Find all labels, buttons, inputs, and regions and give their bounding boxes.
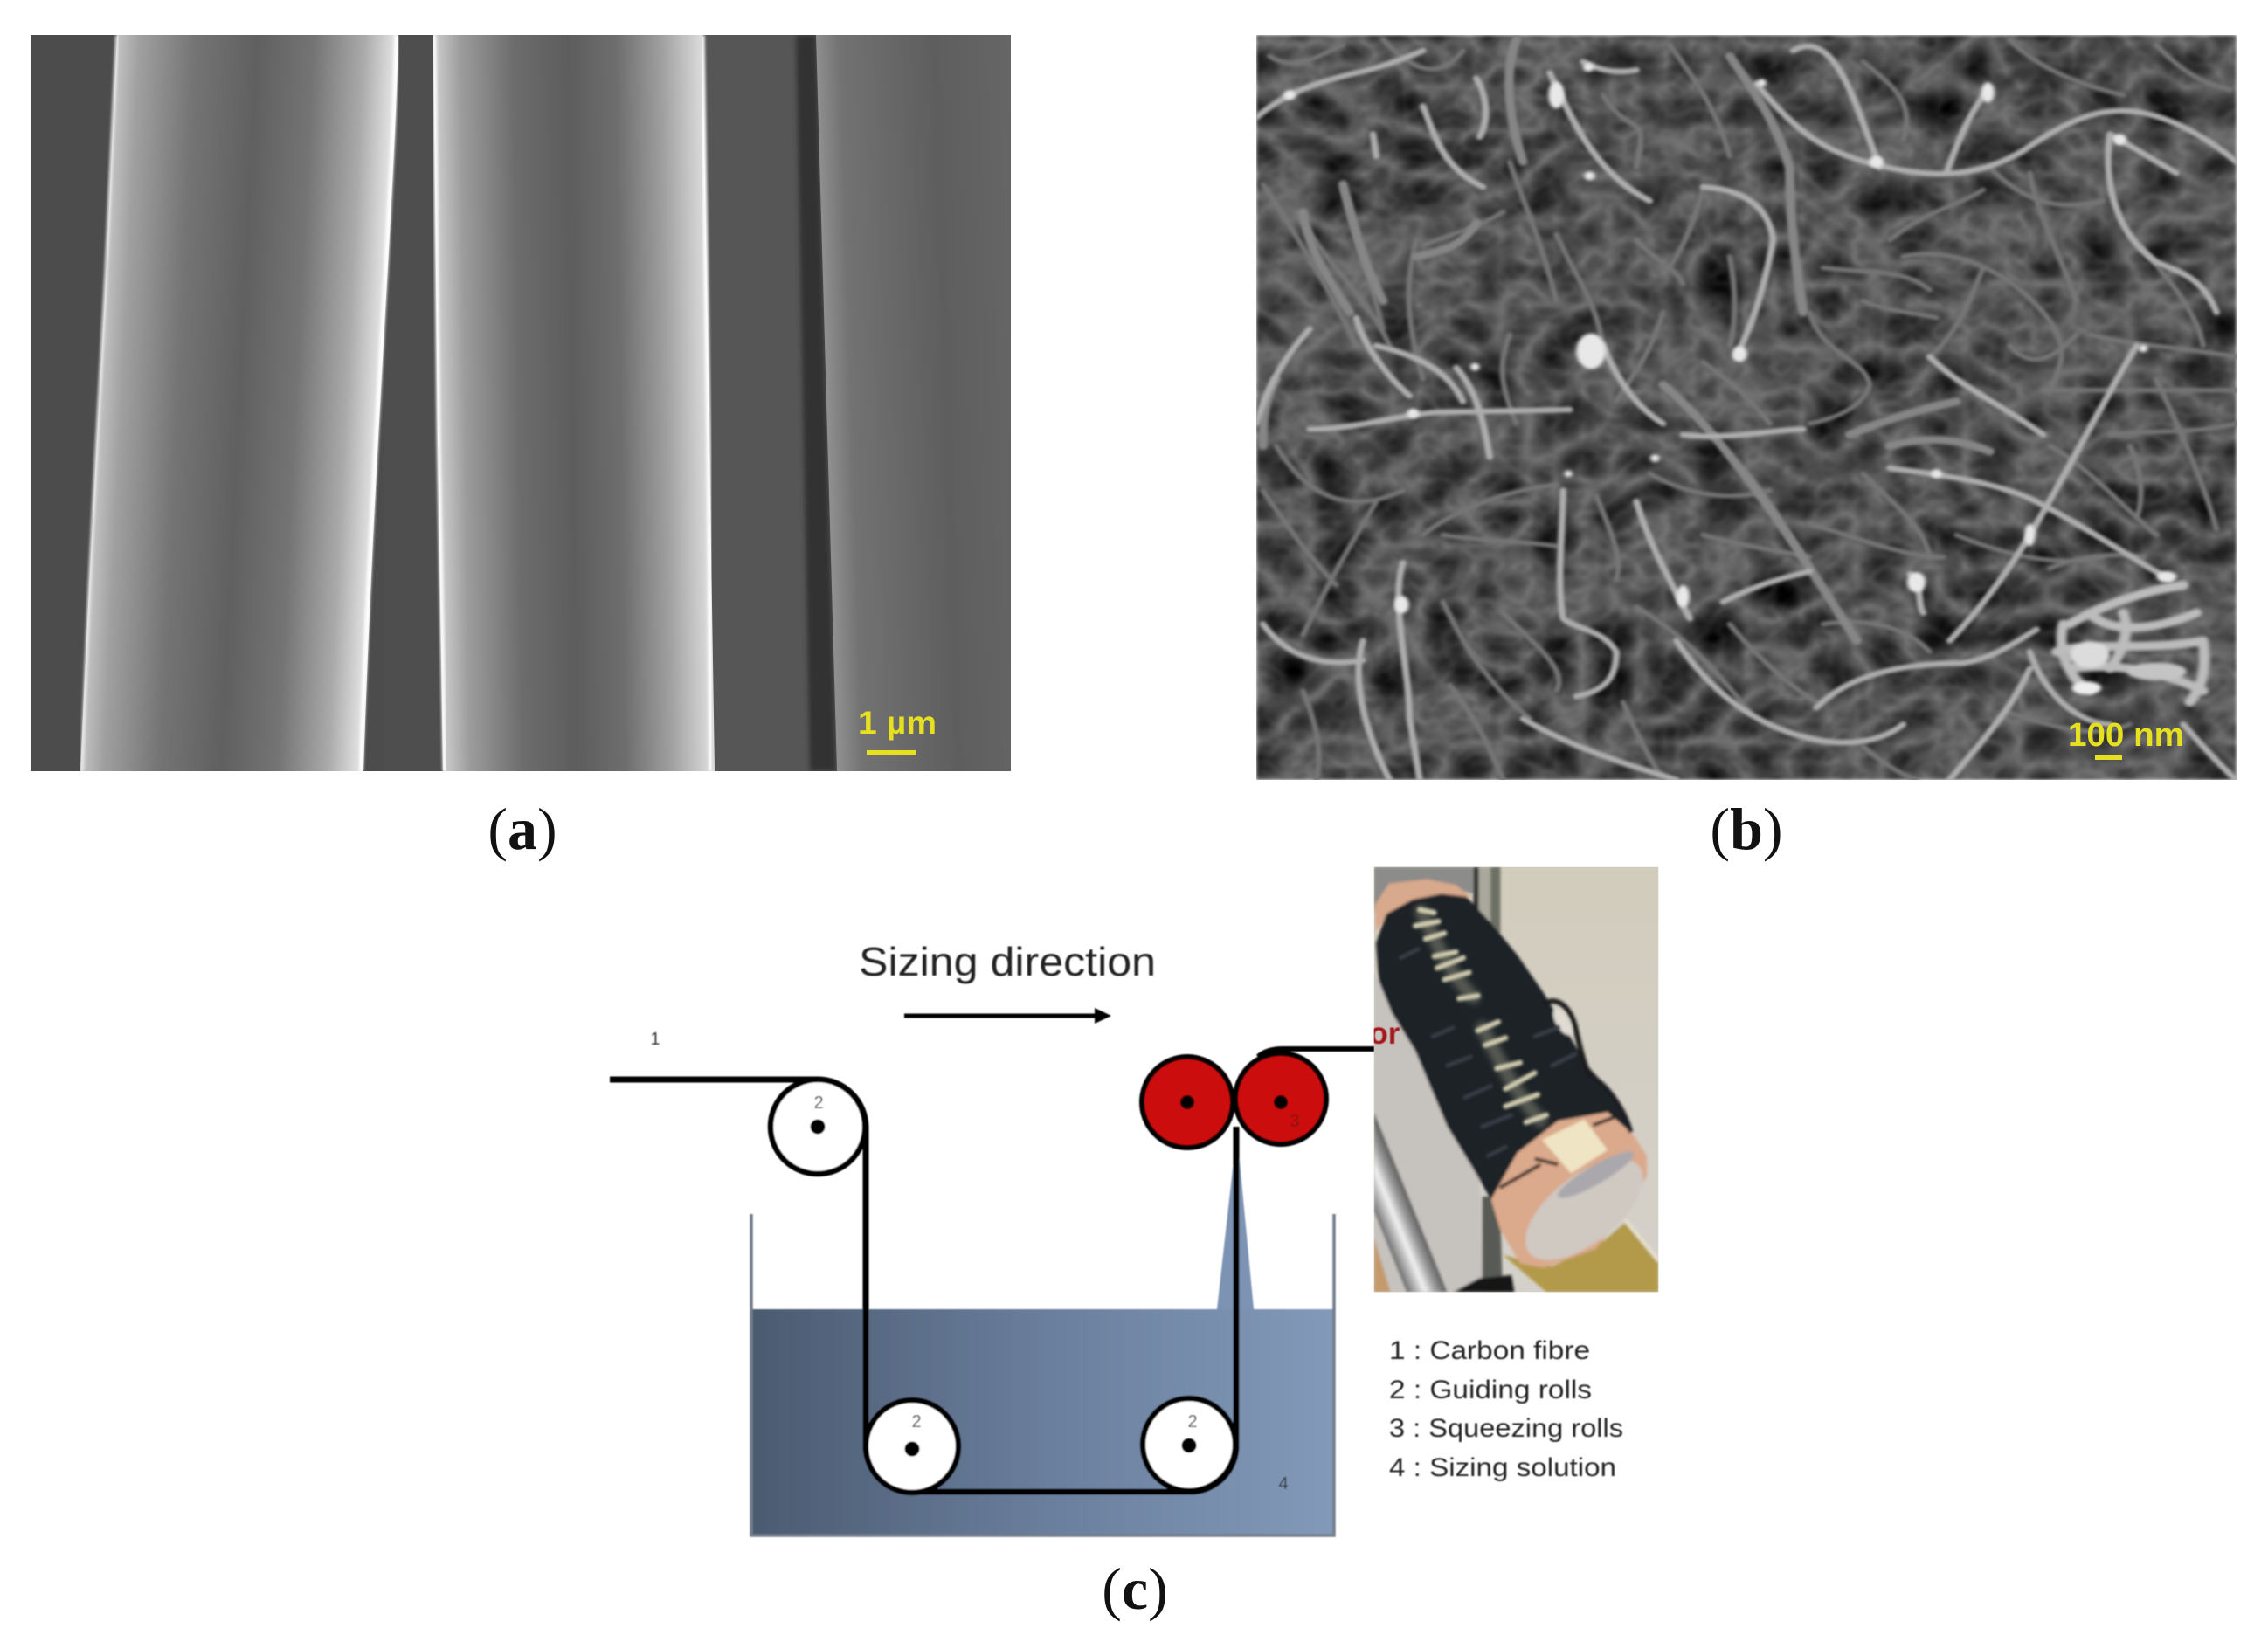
pale fibre highlights [1415, 910, 1546, 1122]
photo: carbon fibre bobbin [1369, 867, 1660, 1292]
squeezing roll right [1235, 1053, 1326, 1144]
carbon fibre path [610, 1080, 1236, 1492]
tube end [1491, 1112, 1647, 1268]
bright strands [1256, 46, 2237, 780]
outgoing fibre [1258, 1049, 1379, 1057]
legend: 1 : Carbon fibre [1389, 1336, 1590, 1365]
legend: 3 : Squeezing rolls [1389, 1414, 1623, 1443]
arrow [904, 1008, 1111, 1024]
legend [1389, 1336, 1623, 1482]
guiding roll bottom left [866, 1400, 958, 1493]
guiding roll bottom left: 2 [911, 1412, 922, 1431]
caption c: (c) [1102, 1556, 1168, 1622]
guiding roll top [771, 1080, 865, 1174]
panel b: SEM image of carbon nanotube network [1256, 35, 2237, 780]
legend: 2 : Guiding rolls [1389, 1376, 1592, 1404]
fibre 2 [433, 35, 715, 771]
dim background strands [1263, 39, 2237, 780]
squeezing roll right: 3 [1290, 1112, 1300, 1131]
fibre sheen [1400, 949, 1575, 1156]
soft highlight bands [1421, 911, 1540, 1121]
fibre 3 [796, 35, 1011, 771]
scale bar: 1 µm: 1 µm [858, 705, 937, 741]
sizing solution bath [751, 1153, 1334, 1535]
scale bar: 1 µm [860, 711, 935, 755]
winding loop [1544, 1001, 1590, 1077]
label on tube [1542, 1120, 1608, 1173]
yellow board [1503, 1223, 1658, 1292]
support post [1483, 1197, 1503, 1292]
label 1: 1 [650, 1030, 660, 1049]
squeezing roll left [1142, 1057, 1233, 1148]
tangled bundle [2057, 585, 2204, 702]
metal pipe [1374, 1112, 1448, 1292]
panel a: SEM image of smooth carbon fibres [31, 35, 1011, 771]
mid-tone strands [1263, 39, 1990, 641]
bright junctions [1283, 63, 2176, 613]
scale bar: 100 nm: 100 nm [2068, 717, 2184, 754]
red lettering behind: or [1369, 1017, 1400, 1051]
label 4: 4 [1278, 1474, 1289, 1494]
caption b: (b) [1710, 796, 1783, 862]
caption a: (a) [487, 796, 557, 862]
heading: sizing direction: Sizing direction [859, 939, 1156, 984]
legend: 4 : Sizing solution [1389, 1453, 1616, 1482]
guiding roll top: 2 [813, 1093, 824, 1113]
guiding roll bottom right [1143, 1398, 1235, 1491]
panel c: sizing line schematic [610, 939, 1623, 1535]
guiding roll bottom right: 2 [1187, 1412, 1198, 1431]
fibre 1 [80, 35, 398, 771]
fibre winding [1376, 893, 1631, 1199]
